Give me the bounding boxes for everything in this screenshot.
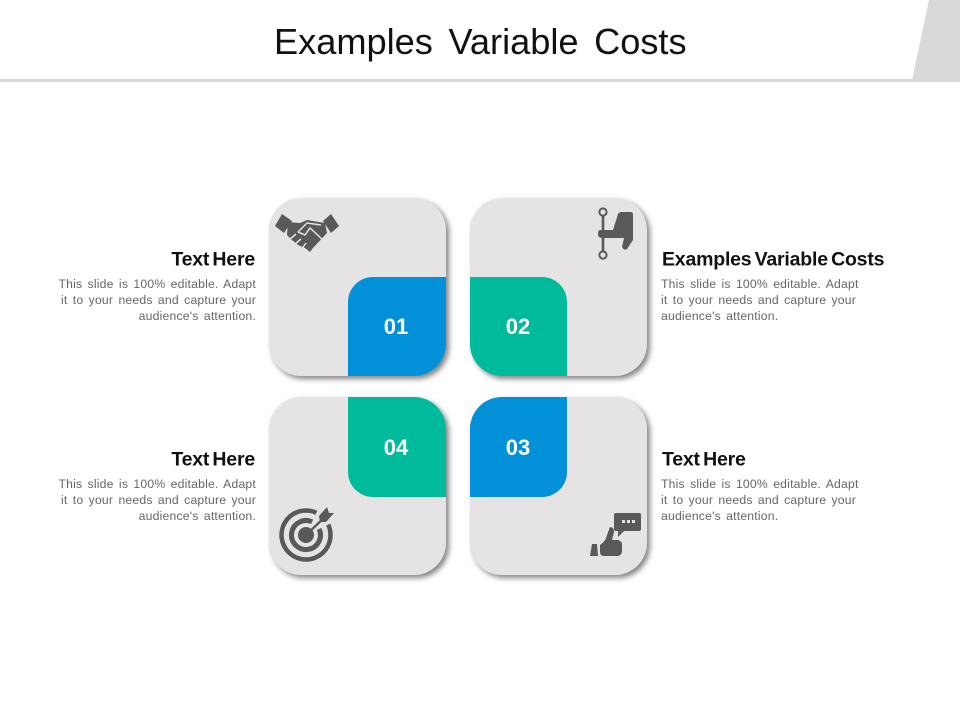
text block: top left: Text Here xyxy=(171,248,255,270)
text block: top left: This slide is 100% editable. Adapt xyxy=(58,277,256,291)
text block: bottom left: it to your needs and capture your xyxy=(61,493,256,507)
panel: card 01 xyxy=(269,198,449,379)
panel: card 02 xyxy=(470,198,650,379)
text block: top left: audience's attention. xyxy=(139,309,256,323)
number tab 02 xyxy=(470,277,567,376)
text block: top right: This slide is 100% editable. Adapt xyxy=(661,277,859,291)
text block: bottom right xyxy=(661,448,859,523)
icon: handshake xyxy=(275,214,339,252)
number tab 02: 02 xyxy=(506,314,530,339)
icon: hand on slider xyxy=(598,208,633,259)
icon: thumbs up with speech bubble xyxy=(590,513,641,556)
text block: top right xyxy=(661,248,885,323)
number tab 03: 03 xyxy=(506,435,530,460)
text block: top right: audience's attention. xyxy=(661,309,778,323)
panel: card 03 xyxy=(470,397,650,578)
header band xyxy=(0,0,960,82)
text block: top right: it to your needs and capture your xyxy=(661,293,856,307)
number tab 01 xyxy=(348,277,446,376)
number tab 01: 01 xyxy=(384,314,408,339)
text block: bottom right: audience's attention. xyxy=(661,509,778,523)
text block: top left: it to your needs and capture your xyxy=(61,293,256,307)
text block: bottom right: Text Here xyxy=(662,448,746,470)
text block: bottom left: Text Here xyxy=(171,448,255,470)
text block: top left xyxy=(58,248,256,323)
number tab 03 xyxy=(470,397,567,497)
icon: target xyxy=(282,507,334,559)
text block: bottom left: audience's attention. xyxy=(139,509,256,523)
text block: bottom left: This slide is 100% editable. Adapt xyxy=(58,477,256,491)
text block: bottom right: it to your needs and capture your xyxy=(661,493,856,507)
panel: card 04 xyxy=(269,397,449,578)
text block: bottom right: This slide is 100% editable. Adapt xyxy=(661,477,859,491)
text block: bottom left xyxy=(58,448,256,523)
number tab 04: 04 xyxy=(384,435,409,460)
number tab 04 xyxy=(348,397,446,497)
text block: top right: Examples Variable Costs xyxy=(662,248,885,270)
title: Examples Variable Costs xyxy=(274,21,687,62)
